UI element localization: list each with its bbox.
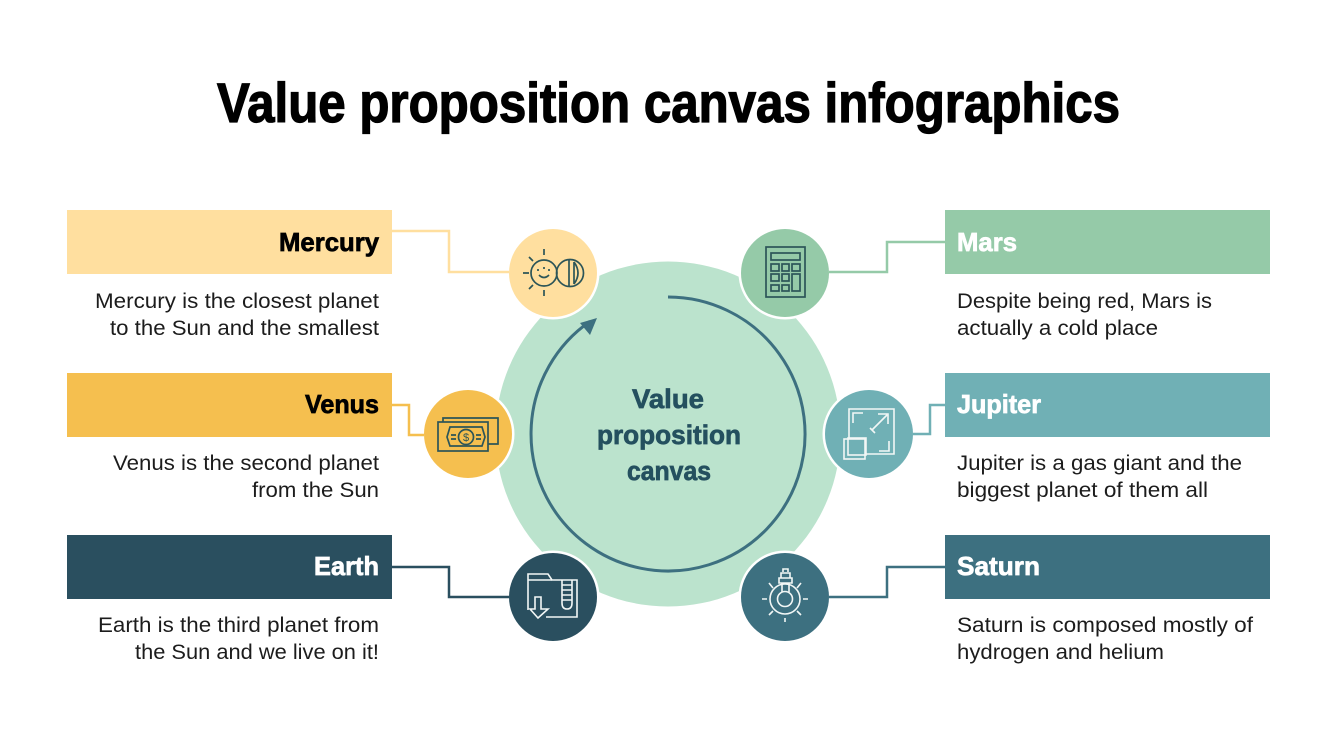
icon: sun and moon <box>506 226 600 320</box>
panel: Saturn: Saturn <box>957 551 1040 581</box>
connector: Venus <box>391 405 424 435</box>
icon: banknotes <box>422 388 514 480</box>
text: Saturn description <box>957 614 1253 664</box>
text: Mars description <box>957 290 1212 340</box>
panel: Venus: Venus <box>305 389 379 419</box>
panel: Mercury: Mercury <box>279 227 380 257</box>
connector: Mars <box>829 242 945 272</box>
text: Mars description: Despite being red, Mars is <box>957 290 1212 313</box>
central label: canvas <box>627 456 711 486</box>
panel: Mars <box>945 210 1270 340</box>
panel: Earth: Earth <box>314 551 379 581</box>
text: Earth description: Earth is the third planet from <box>98 614 379 637</box>
central label: Value <box>632 384 704 414</box>
icon: calculator <box>738 226 832 320</box>
text: Venus description: Venus is the second planet <box>113 452 379 475</box>
icon: resize frame <box>822 388 916 480</box>
text: Mercury description: Mercury is the closest planet <box>95 290 379 313</box>
connector: Saturn <box>829 567 945 597</box>
connector: Mercury <box>391 231 509 272</box>
cycle arrow <box>531 297 805 571</box>
icon: banknotes: $ <box>463 432 469 444</box>
panel: central circle <box>496 262 840 606</box>
connector: Earth <box>391 567 509 597</box>
text: Mercury description <box>95 290 379 340</box>
panel: Mars: Mars <box>957 227 1017 257</box>
central label <box>597 384 741 486</box>
text: Mercury description: to the Sun and the smallest <box>110 317 379 340</box>
text: Venus description <box>113 452 379 502</box>
panel: Earth <box>67 535 392 664</box>
text: Mars description: actually a cold place <box>957 317 1158 340</box>
panel: Jupiter <box>945 373 1270 502</box>
central label: proposition <box>597 420 741 450</box>
text: Jupiter description <box>957 452 1242 502</box>
title: Value proposition canvas infographics <box>217 71 1120 134</box>
text: Saturn description: hydrogen and helium <box>957 641 1164 664</box>
connector: Jupiter <box>913 405 945 434</box>
panel: Jupiter: Jupiter <box>957 389 1041 419</box>
panel: Venus <box>67 373 392 502</box>
text: Saturn description: Saturn is composed mostly of <box>957 614 1253 637</box>
icon: folder with zip <box>506 550 600 644</box>
panel: Mercury <box>67 210 392 340</box>
text: Jupiter description: biggest planet of them all <box>957 479 1208 502</box>
text: Venus description: from the Sun <box>252 479 379 502</box>
text: Earth description <box>98 614 379 664</box>
text: Earth description: the Sun and we live on it! <box>135 641 379 664</box>
panel: Saturn <box>945 535 1270 664</box>
icon: light bulb <box>738 550 832 644</box>
text: Jupiter description: Jupiter is a gas giant and the <box>957 452 1242 475</box>
